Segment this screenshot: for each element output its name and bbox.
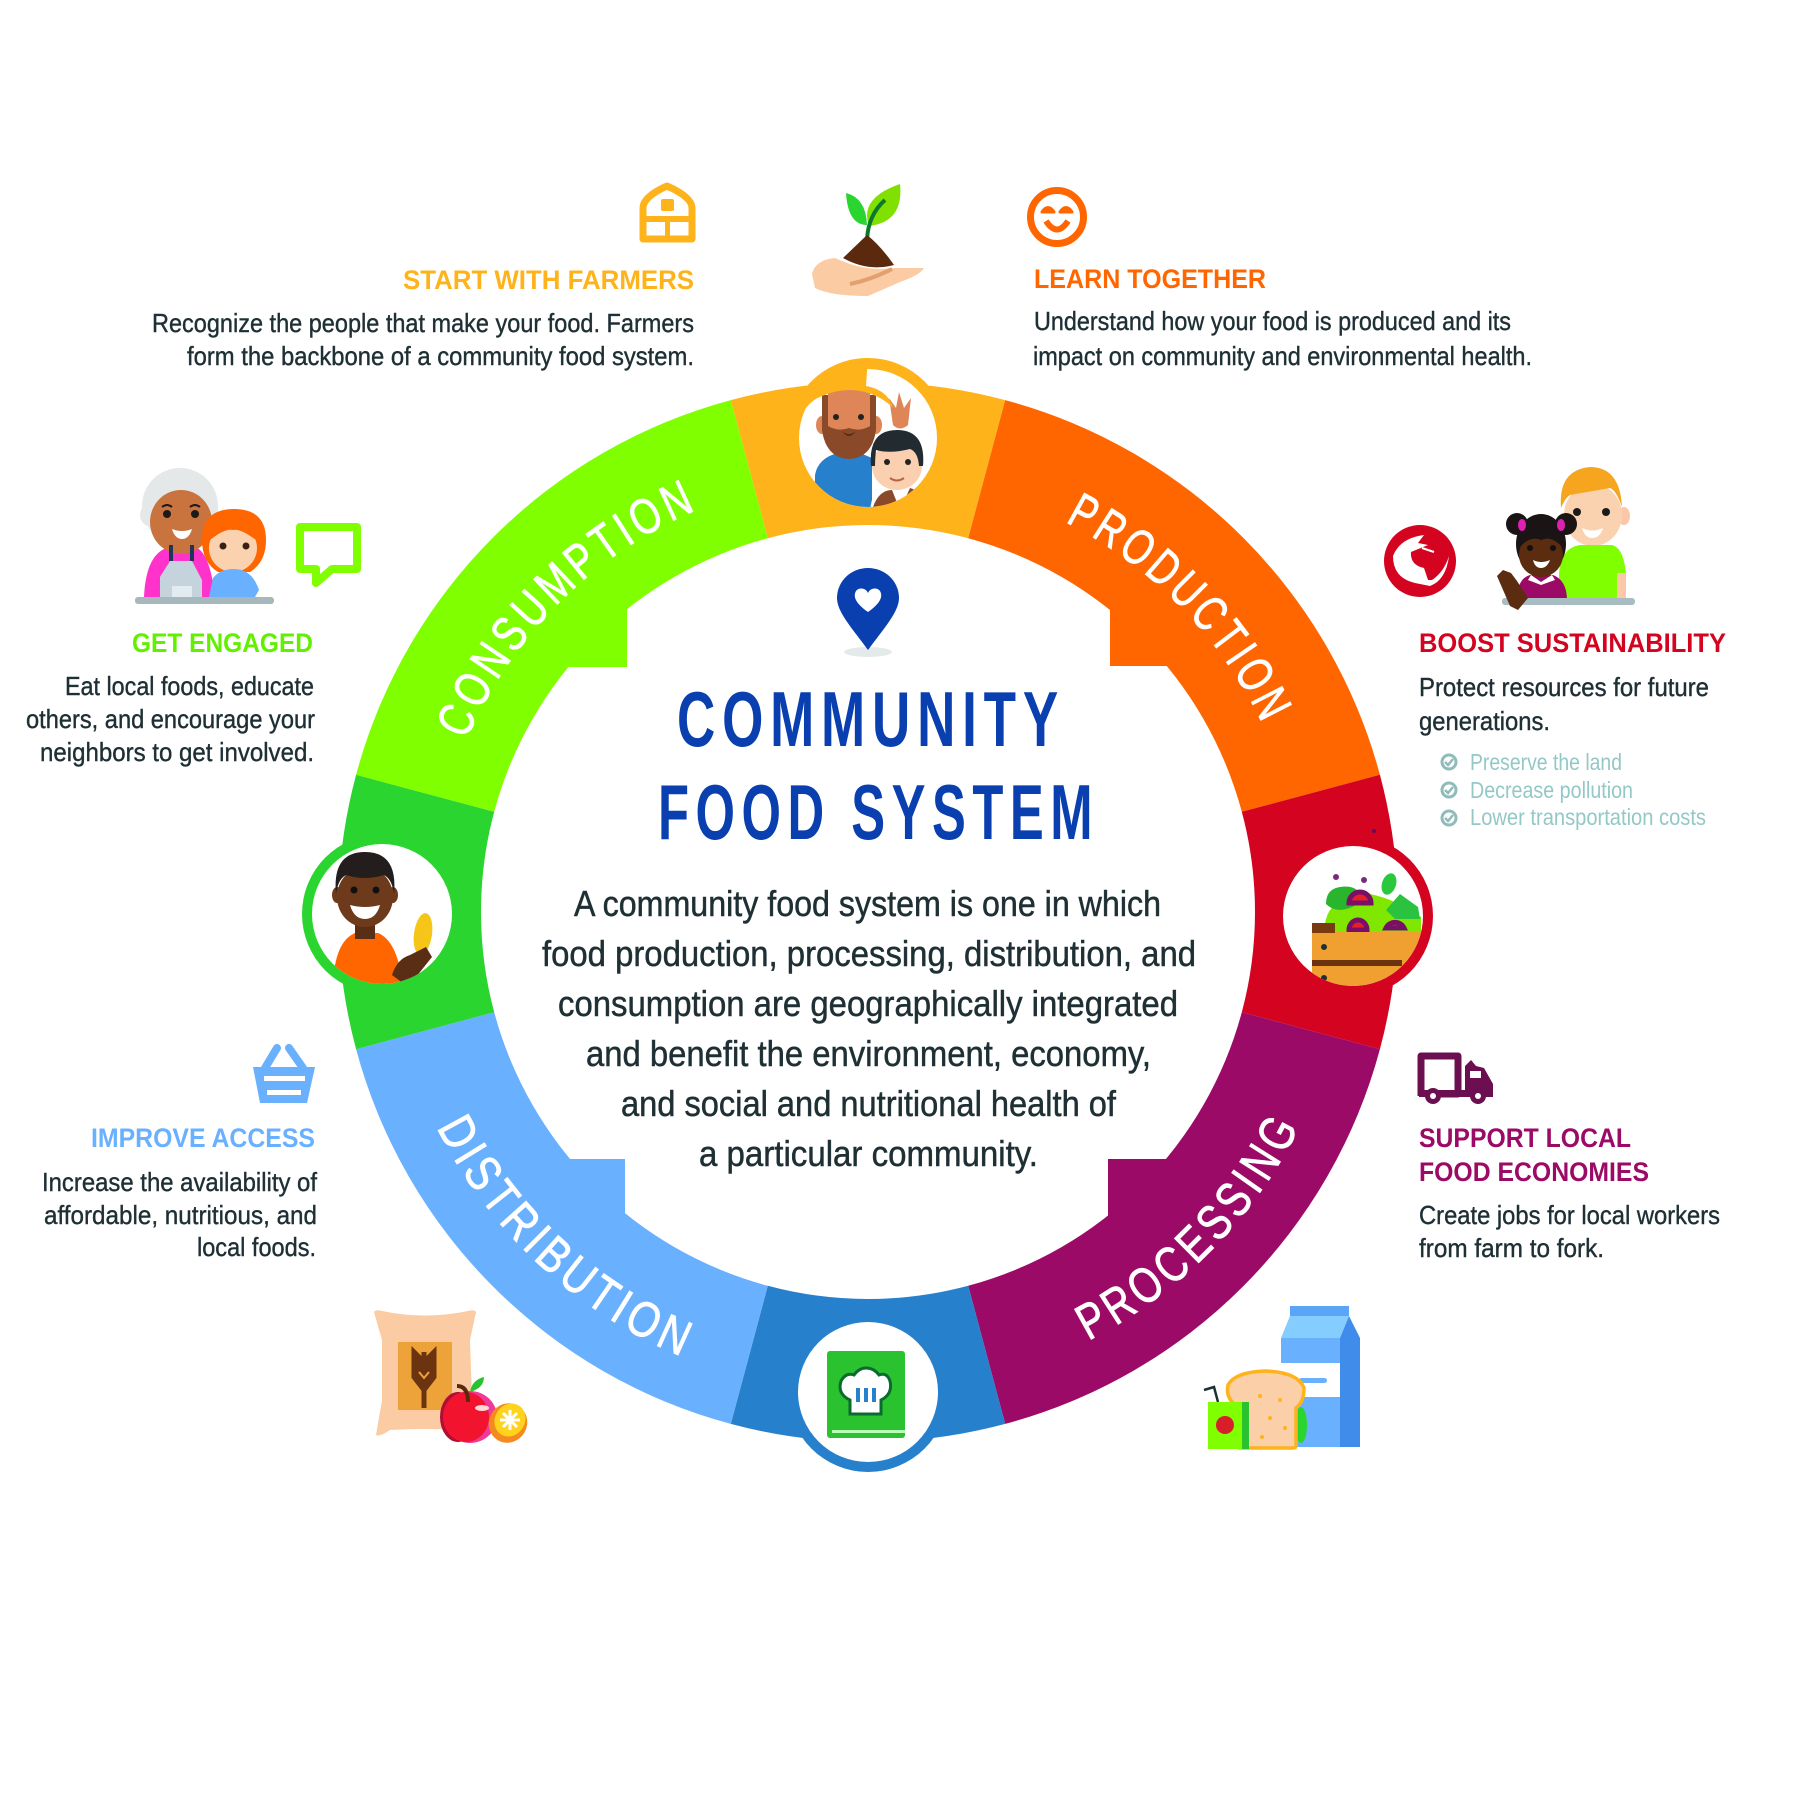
section: boost sustainability: BOOST SUSTAINABILITY (1419, 628, 1726, 658)
ring segment: sustainability (red) (1242, 775, 1433, 1049)
section: improve access (42, 1123, 318, 1262)
illustration: grandmother and girl (135, 468, 274, 604)
center description: and social and nutritional health of (621, 1083, 1117, 1124)
illustration: grain sack and fruit (374, 1310, 534, 1450)
section: boost sustainability: Protect resources for future (1419, 672, 1709, 702)
illustration: milk, bread and juice (1204, 1306, 1360, 1449)
ring segment: engaged (green) (302, 775, 494, 1049)
section: learn together: Understand how your food is produced and its (1034, 306, 1511, 336)
ring segment: production (968, 400, 1380, 812)
infographic: community food system wheel (26, 182, 1726, 1472)
section: improve access: IMPROVE ACCESS (91, 1123, 315, 1153)
checklist: Preserve the land (1470, 749, 1622, 775)
ring segment: distribution (356, 1012, 768, 1424)
ring segment: processing: PROCESSING (1074, 1118, 1295, 1340)
section: start with farmers (152, 265, 694, 371)
icon: barn (643, 186, 692, 239)
section: boost sustainability (1419, 628, 1726, 830)
section: boost sustainability: generations. (1419, 706, 1550, 736)
section: improve access: local foods. (197, 1232, 316, 1262)
center description: and benefit the environment, economy, (586, 1033, 1151, 1074)
section: learn together: LEARN TOGETHER (1034, 264, 1266, 294)
section: support local food economies: FOOD ECONOMIES (1419, 1157, 1649, 1187)
icon: shopping basket (253, 1048, 315, 1103)
badge: cookbook (798, 1322, 938, 1462)
section: learn together: impact on community and environmental health. (1033, 341, 1532, 371)
checklist (1442, 749, 1706, 830)
badge: boy with corn (312, 844, 452, 987)
ring segment: processing (968, 1012, 1380, 1424)
ring segment: consumption (356, 400, 768, 812)
section: get engaged: neighbors to get involved. (40, 737, 314, 767)
badge: salad crate (1283, 846, 1423, 988)
section: get engaged: others, and encourage your (26, 704, 315, 734)
section: start with farmers: form the backbone of a community food system. (187, 341, 694, 371)
section: start with farmers: Recognize the people that make your food. Farmers (152, 308, 694, 338)
ring segment: cookbook (dark blue) (731, 1286, 1005, 1472)
center description: A community food system is one in which (574, 883, 1161, 924)
section: get engaged (26, 628, 315, 767)
checklist: Decrease pollution (1470, 777, 1633, 803)
section: start with farmers: START WITH FARMERS (403, 265, 694, 295)
badge: farmer and boy (799, 358, 937, 510)
section: support local food economies: Create jobs for local workers (1419, 1200, 1720, 1230)
section: support local food economies: SUPPORT LOCAL (1419, 1123, 1631, 1153)
section: learn together (1033, 264, 1532, 371)
center description: food production, processing, distribution, and (542, 933, 1196, 974)
ring segment: production: PRODUCTION (1067, 492, 1292, 721)
center description: a particular community. (699, 1133, 1038, 1174)
section: support local food economies: from farm to fork. (1419, 1233, 1604, 1263)
icon: globe (1384, 525, 1456, 597)
icon: delivery truck (1419, 1056, 1493, 1104)
section: improve access: affordable, nutritious, and (44, 1200, 317, 1230)
ring segment: start with farmers (yellow) (731, 358, 1005, 538)
icon: speech bubble (300, 527, 357, 583)
ring segment: consumption: CONSUMPTION (439, 480, 694, 734)
center description (542, 883, 1196, 1174)
center description: consumption are geographically integrated (558, 983, 1178, 1024)
ring segment: distribution: DISTRIBUTION (438, 1114, 693, 1356)
title (658, 675, 1099, 856)
icon: smiley (1030, 190, 1084, 244)
icon: sprout in hand (812, 184, 924, 296)
title: FOOD SYSTEM (658, 768, 1099, 856)
section: get engaged: GET ENGAGED (132, 628, 313, 658)
checklist: Lower transportation costs (1470, 804, 1706, 830)
icon: location pin with heart (837, 568, 899, 657)
section: support local food economies (1419, 1123, 1720, 1263)
section: improve access: Increase the availability of (42, 1167, 318, 1197)
title: COMMUNITY (677, 675, 1065, 763)
illustration: two children (1497, 467, 1635, 610)
section: get engaged: Eat local foods, educate (65, 671, 314, 701)
